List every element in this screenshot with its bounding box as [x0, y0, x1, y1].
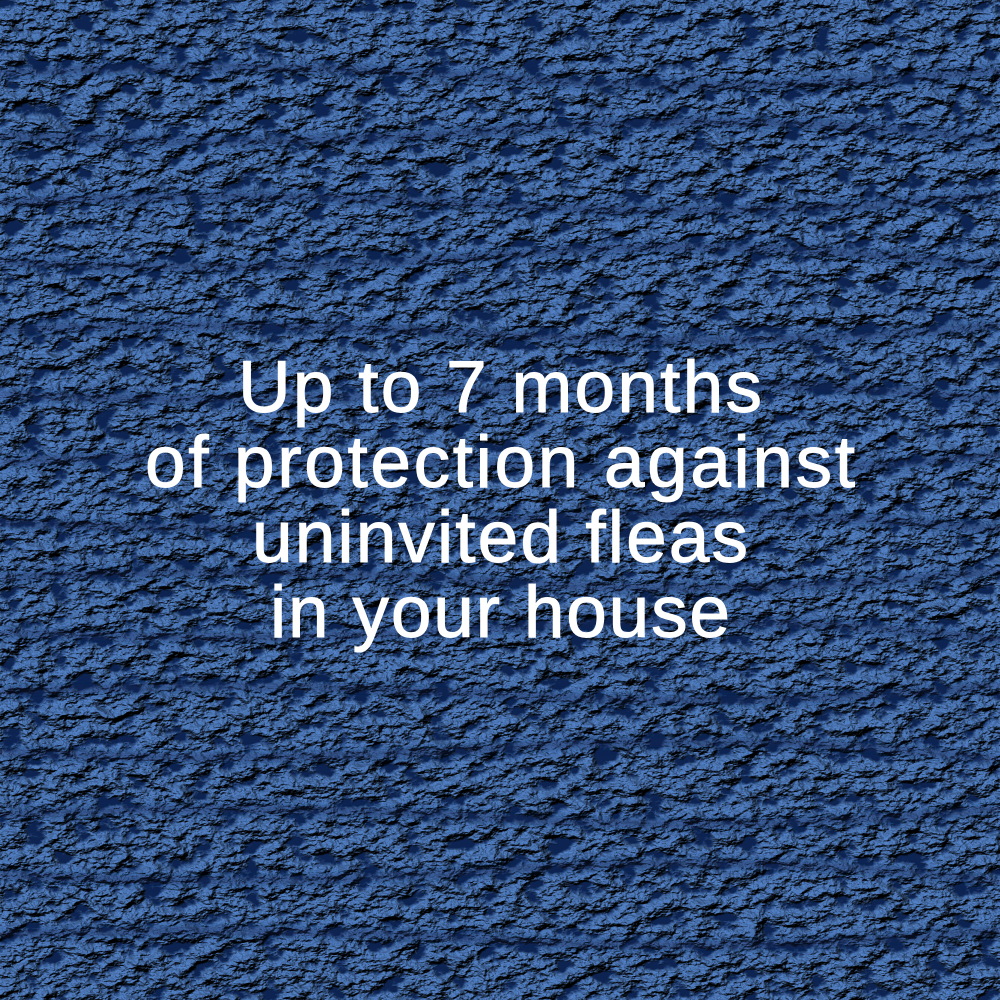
- title: headline text: in your house: [270, 572, 730, 653]
- title: headline text: Up to 7 months: [238, 347, 762, 428]
- title: headline text: [145, 347, 855, 653]
- title: headline text: uninvited fleas: [252, 497, 748, 578]
- title: headline text: of protection against: [145, 422, 855, 503]
